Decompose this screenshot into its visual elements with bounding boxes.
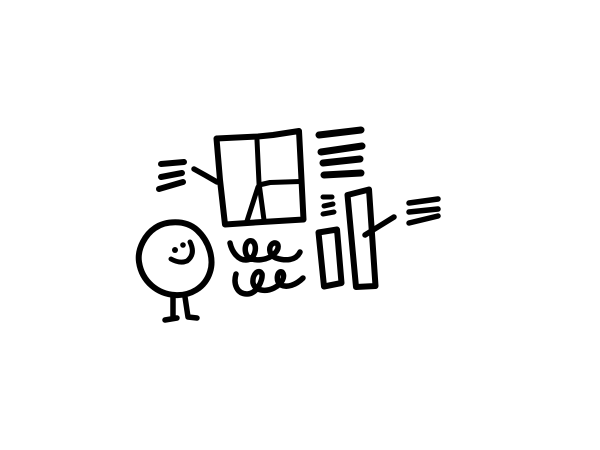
left leg: [165, 295, 177, 320]
text block: handwriting squiggles: [230, 241, 303, 294]
right leg: [185, 297, 197, 318]
short bar: [318, 230, 342, 286]
tall bar: [348, 190, 376, 287]
text block: left lines: [159, 162, 184, 189]
smile: [171, 242, 192, 262]
text block: right lines: [409, 199, 438, 223]
panel: window chart: [216, 131, 304, 224]
bar chart: [318, 190, 376, 287]
arrow: connector to left text lines: [194, 169, 217, 182]
text block: upper right lines: [319, 130, 362, 175]
head: [139, 222, 211, 295]
arrow: connector to right text lines: [365, 217, 394, 235]
character: smiling figure: [139, 222, 211, 320]
eye right: [180, 242, 186, 248]
text block: small lines above short bar: [323, 197, 334, 214]
eye left: [172, 247, 178, 253]
